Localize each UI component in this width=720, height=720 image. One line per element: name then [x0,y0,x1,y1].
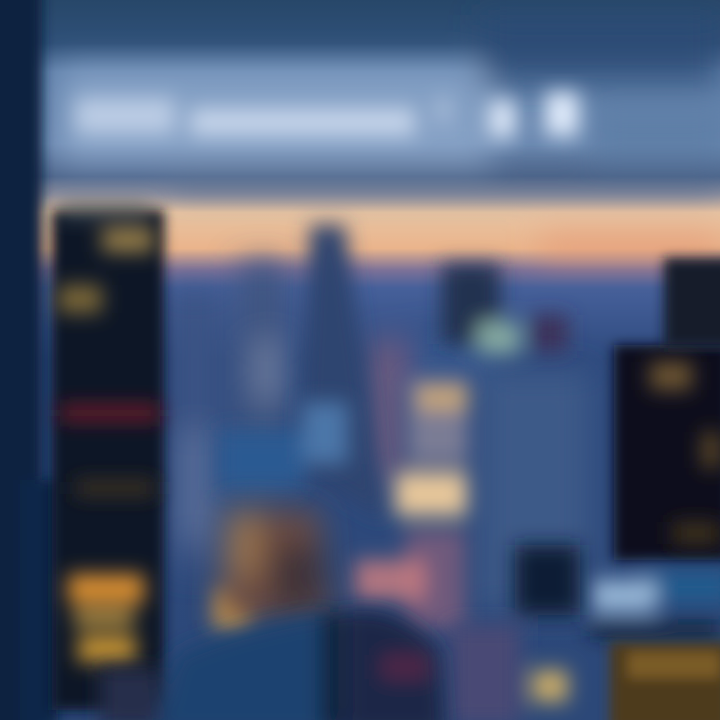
foreground figure: head [218,510,332,620]
distant towers [170,262,590,610]
sky cloud bands [60,15,720,256]
central lit building [218,378,468,630]
left dark building with windows [52,205,164,710]
street lights [215,545,580,720]
left tower [0,0,58,720]
foreground figure: shoulders [100,610,445,720]
bottom right amber building [610,642,720,720]
blurred headline shapes [75,92,579,138]
main central towers [300,225,568,520]
right dark building [614,258,720,560]
right blue roof [590,572,720,636]
